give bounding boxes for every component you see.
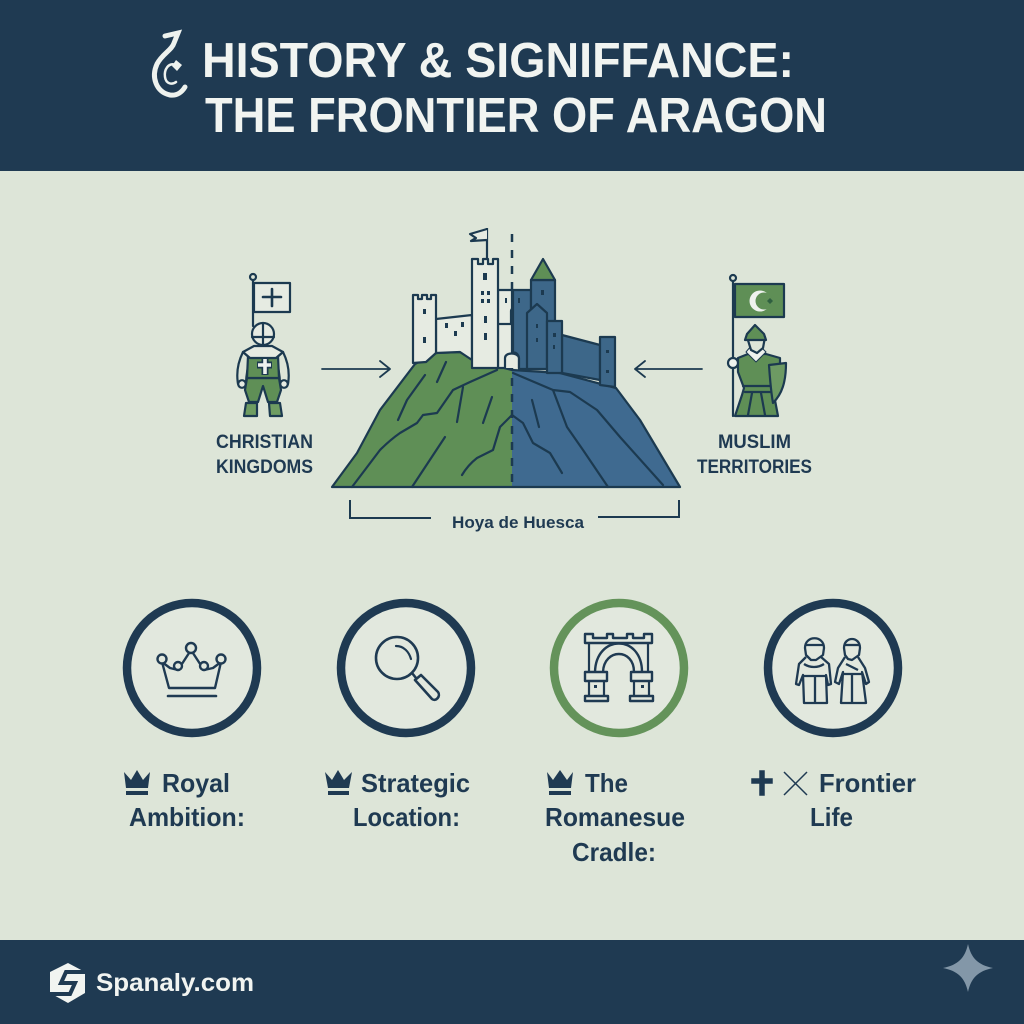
panel: Strategic Location <box>325 603 471 832</box>
label: Muslim territories: TERRITORIES <box>697 457 812 478</box>
icon: small crown <box>124 770 150 795</box>
icon: magnifier in circle <box>341 603 471 733</box>
knight legs and boots <box>245 378 281 402</box>
panel: Christian kingdoms <box>216 274 313 478</box>
icon: small crown <box>325 770 352 795</box>
label: The Romanesue Cradle: Romanesue <box>545 802 685 832</box>
panel: Frontier Life <box>752 603 916 832</box>
arrow: left toward mountain <box>322 361 390 377</box>
icon: Christian knight with flag <box>237 274 290 416</box>
mountain: Christian side <box>332 352 512 487</box>
mountain: Muslim side <box>512 370 680 487</box>
label: Royal Ambition <box>124 768 245 832</box>
label: Frontier Life: Frontier <box>819 768 916 798</box>
label: Frontier Life: Life <box>810 802 853 832</box>
dashed border line <box>511 234 513 487</box>
label: Christian kingdoms: CHRISTIAN <box>216 432 313 453</box>
knight torso <box>247 356 279 378</box>
castle: Christian side <box>413 228 519 368</box>
title: HISTORY & SIGNIFFANCE: <box>202 34 794 88</box>
knight arms <box>237 352 250 384</box>
label: Muslim territories <box>697 432 812 478</box>
castle windows <box>423 273 609 373</box>
label: The Romanesue Cradle: Cradle: <box>572 837 656 867</box>
castle: Muslim side <box>513 259 615 387</box>
icon: Muslim soldier with flag <box>728 275 786 416</box>
label: The Romanesue Cradle: The <box>585 768 628 798</box>
footer band <box>0 940 1024 1024</box>
label: Frontier Life <box>752 768 916 832</box>
title <box>202 34 827 143</box>
bracket: Hoya de Huesca <box>350 500 679 532</box>
label: Strategic Location: Location: <box>353 802 460 832</box>
title: THE FRONTIER OF ARAGON <box>205 89 827 143</box>
icon: two figures in circle <box>768 603 898 733</box>
icon: crown in circle <box>127 603 257 733</box>
panel: castle on divided mountain <box>332 228 680 487</box>
label: Christian kingdoms: KINGDOMS <box>216 457 313 478</box>
arrow: right toward mountain <box>635 361 702 377</box>
panel: The Romanesque Cradle <box>545 603 685 867</box>
icon: plus and crossed arrows <box>752 771 807 795</box>
label: Hoya de Huesca: Hoya de Huesca <box>452 513 585 532</box>
label: Strategic Location: Strategic <box>361 768 470 798</box>
header band <box>0 0 1024 171</box>
label: Muslim territories: MUSLIM <box>718 432 791 453</box>
brand name: Spanaly.com <box>96 969 254 997</box>
icon: sparkle star <box>943 944 993 992</box>
icon: Spanaly logo <box>47 963 88 1003</box>
label: Royal Ambition: Ambition: <box>129 802 245 832</box>
icon: small crown <box>547 770 573 795</box>
label: The Romanesue Cradle <box>545 768 685 867</box>
mountain outline and ridges <box>332 352 680 487</box>
panel: Muslim territories <box>697 275 812 478</box>
panel: Royal Ambition <box>124 603 257 832</box>
icon: arch in circle <box>554 603 684 733</box>
label: Royal Ambition: Royal <box>162 768 230 798</box>
label: Strategic Location <box>325 768 470 832</box>
icon: title emblem <box>155 33 185 95</box>
label: Christian kingdoms <box>216 432 313 478</box>
